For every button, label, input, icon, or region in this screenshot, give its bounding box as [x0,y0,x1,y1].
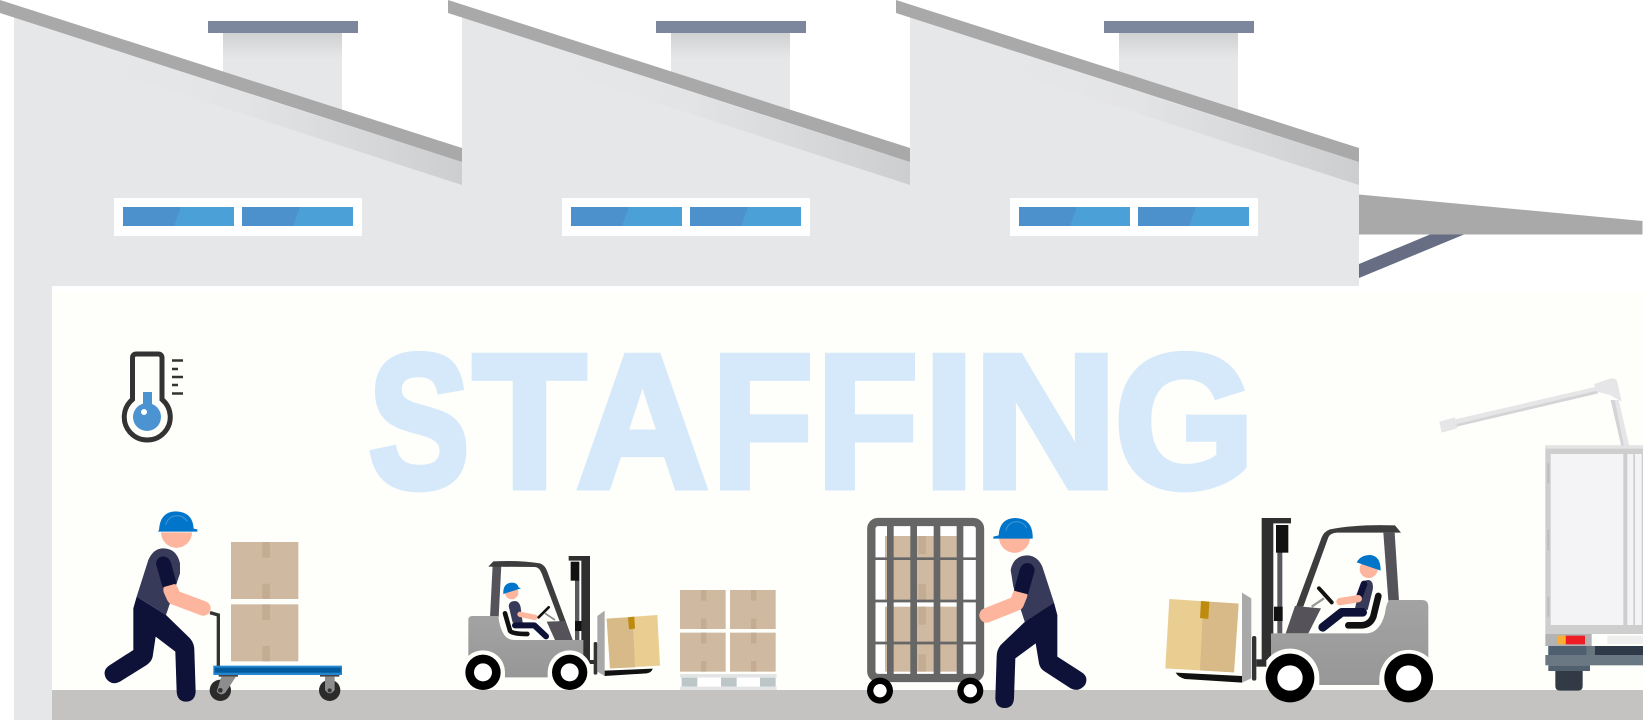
roof shadow 1 [120,53,462,185]
carried box [1165,599,1239,672]
sleeve [156,556,177,587]
truck body [468,616,583,677]
truck body [1271,600,1428,685]
large forklift [1165,518,1433,702]
building section 3 [896,0,1359,286]
cart deck [213,666,342,675]
mast [569,556,590,663]
head [161,532,192,548]
heading: STAFFING: F [817,316,918,528]
heading: STAFFING: I [924,316,974,528]
dashboard [1286,606,1321,633]
cab roof [488,561,573,640]
icon: thermometer [124,354,183,440]
cab roof [1296,525,1401,607]
window 2 [562,198,810,236]
cart handle [210,613,218,667]
worker pushing roll cage [867,518,1086,708]
chimney 1 [208,21,358,118]
roof shadow 3 [1016,53,1359,185]
heading: STAFFING: F [712,316,813,528]
mast [1262,518,1291,660]
head [999,537,1030,553]
legs [995,603,1086,708]
wall 1 [14,17,462,286]
cage frame [871,522,980,678]
roof shadow 2 [568,53,910,185]
loading dock awning [1359,194,1642,234]
chimney 3 [1104,21,1254,118]
building section 2 [448,0,910,286]
roof 1 [0,0,462,162]
wheels [461,650,592,690]
left wall pillar [14,280,52,720]
building section 1 [0,0,462,286]
heading: STAFFING: A [576,316,708,528]
legs [105,597,196,702]
hard hat [158,511,197,532]
window 1 [114,198,362,236]
heading: STAFFING: G [1114,316,1254,528]
chassis [1545,646,1643,671]
cage contents [876,526,976,674]
fork carriage [590,611,653,676]
wall 3 [910,17,1359,286]
wheels [1261,649,1433,702]
interior back wall [52,292,1643,692]
heading: STAFFING: T [473,316,586,528]
loading arm [1439,378,1629,446]
floor [52,690,1643,720]
roof 3 [896,0,1359,162]
rear pillar [490,565,501,617]
roof 2 [448,0,910,162]
heading: STAFFING: N [974,316,1118,528]
arm [987,595,1020,615]
tire [1555,671,1583,691]
driver [1312,555,1381,627]
rear pillar [1383,533,1399,601]
awning strut [1359,234,1464,278]
arm [171,590,203,608]
delivery truck rear [1439,378,1643,691]
wall 2 [462,17,910,286]
window 3 [1010,198,1258,236]
cart wheels [210,675,340,701]
carried box [607,615,660,668]
pallet of boxes [680,590,777,690]
torso [1011,555,1054,623]
stacked boxes [231,542,298,661]
heading: STAFFING: S [368,316,470,528]
worker pushing hand cart [105,511,342,702]
tail lights [1545,634,1643,646]
torso [137,548,180,615]
driver [503,583,555,636]
small forklift [461,556,777,690]
chimney 2 [656,21,806,118]
cage wheels [867,678,983,704]
hard hat [993,518,1033,539]
sleeve [1014,563,1035,594]
dashboard [547,621,573,640]
fork carriage [1176,593,1266,683]
cargo box [1545,445,1643,634]
